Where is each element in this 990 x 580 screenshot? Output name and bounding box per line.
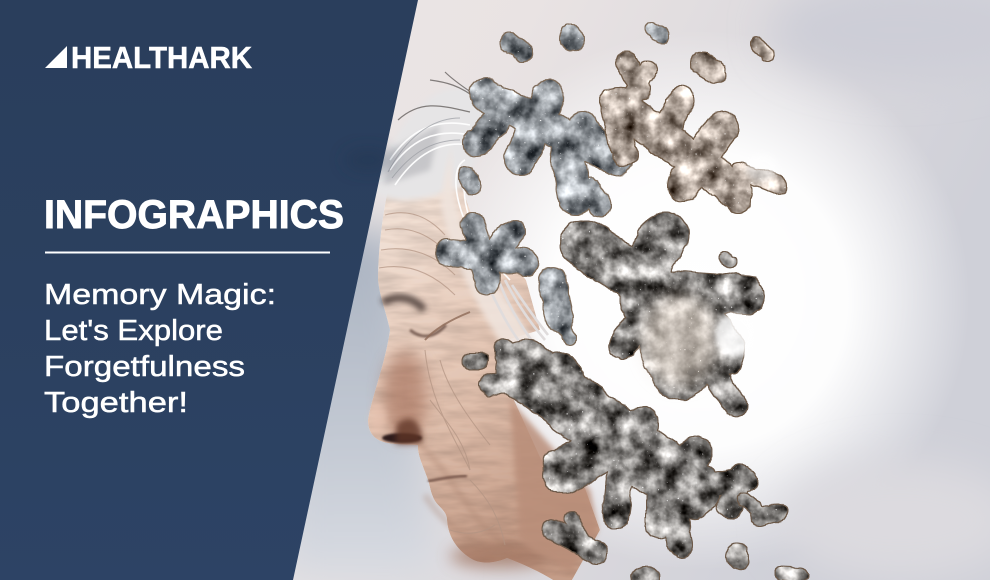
puzzle piece: lower band	[490, 350, 745, 545]
puzzle piece: lower fragment	[553, 520, 597, 553]
puzzle piece: upper left band	[476, 95, 615, 205]
subtitle text block: Let's Explore	[44, 315, 223, 347]
mouth	[428, 476, 467, 481]
wrinkles	[379, 213, 505, 545]
subtitle text block: Forgetfulness	[44, 351, 245, 383]
scattered fragments: brown	[701, 45, 768, 72]
logo triangle	[45, 46, 67, 68]
puzzle piece: small left cross	[448, 225, 525, 282]
central glow	[715, 313, 755, 357]
face profile	[368, 110, 600, 580]
hair	[372, 72, 548, 350]
logo wordmark: HEALTHARK	[71, 40, 253, 75]
puzzle piece: upper right band	[612, 62, 778, 200]
scattered fragments: grey	[467, 25, 662, 186]
divider	[45, 252, 330, 254]
ghosted eye	[344, 148, 392, 172]
central cream highlight	[642, 294, 718, 386]
puzzle piece: central band	[585, 235, 745, 405]
logo: HEALTHARK	[45, 40, 253, 75]
heading: INFOGRAPHICS	[44, 193, 344, 237]
skin silhouette	[368, 110, 600, 580]
scattered fragments: dark	[470, 361, 800, 580]
nose and cheek shading	[370, 351, 598, 573]
subtitle text block: Together!	[44, 387, 188, 419]
puzzle tail glow	[746, 154, 778, 182]
subtitle text block	[44, 279, 276, 419]
eyebrow and eye	[383, 298, 470, 340]
panel: navy left	[0, 0, 418, 580]
puzzle piece: hanging fragment	[552, 282, 570, 338]
subtitle text block: Memory Magic:	[44, 279, 276, 311]
